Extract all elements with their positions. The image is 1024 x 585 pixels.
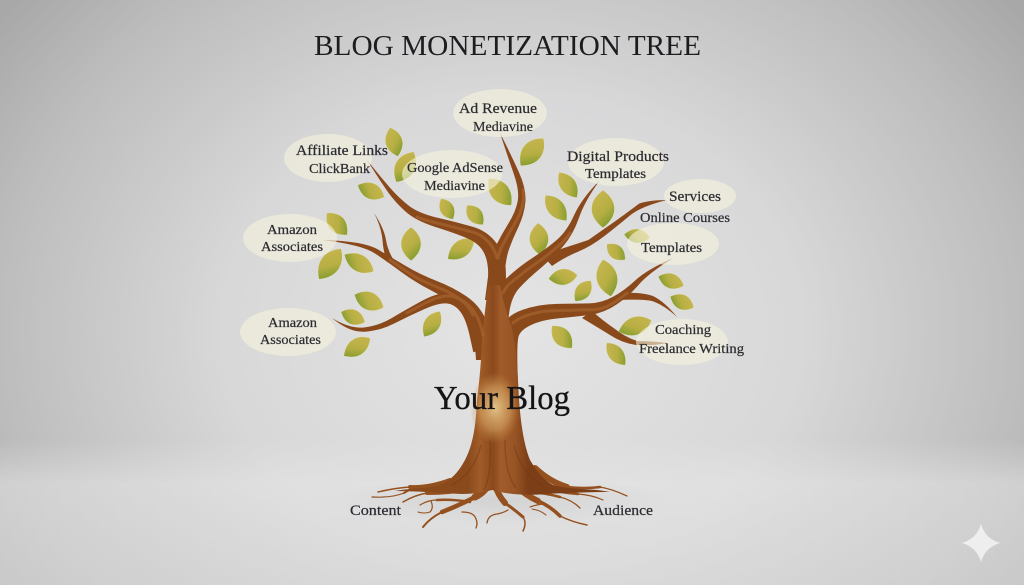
label: amazon associates upper: Amazon [267,223,317,238]
title: BLOG MONETIZATION TREE [314,31,701,62]
tree [323,133,677,531]
label: affiliate links: Affiliate Links [296,143,388,159]
label ellipses [240,89,736,365]
label: ad revenue: Ad Revenue [459,101,537,117]
label: content: Content [350,503,401,519]
label: amazon associates lower: Associates [260,333,321,348]
label: ad revenue: Mediavine [473,119,533,134]
label: audience: Audience [593,503,653,519]
branch highlights [390,190,627,335]
label: google adsense [407,161,503,193]
trunk grain [452,440,543,490]
label: amazon associates upper [261,223,323,255]
label: online courses: Online Courses [640,211,730,226]
label: ad revenue [459,101,537,134]
label: your blog: Your Blog [434,380,570,417]
label: google adsense: Google AdSense [407,161,503,176]
label: amazon associates lower [260,316,321,348]
icon: sparkle [962,524,1000,562]
label: digital products: Templates [585,166,646,181]
branches [323,133,677,390]
trunk [395,285,610,495]
label: coaching and freelance writing: Freelance Writing [639,342,744,357]
leaves [311,125,697,370]
label: amazon associates upper: Associates [261,240,323,255]
label: coaching and freelance writing: Coaching [655,323,711,338]
label: coaching and freelance writing [639,323,744,357]
roots [372,468,627,531]
label: digital products: Digital Products [567,149,669,165]
trunk glow [470,372,520,444]
label: affiliate links: ClickBank [309,161,370,176]
label: templates: Templates [641,240,702,255]
label: google adsense: Mediavine [424,178,485,193]
label: affiliate links [296,143,388,176]
label: digital products [567,149,669,181]
label: services: Services [669,189,721,205]
label: amazon associates lower: Amazon [268,316,317,331]
